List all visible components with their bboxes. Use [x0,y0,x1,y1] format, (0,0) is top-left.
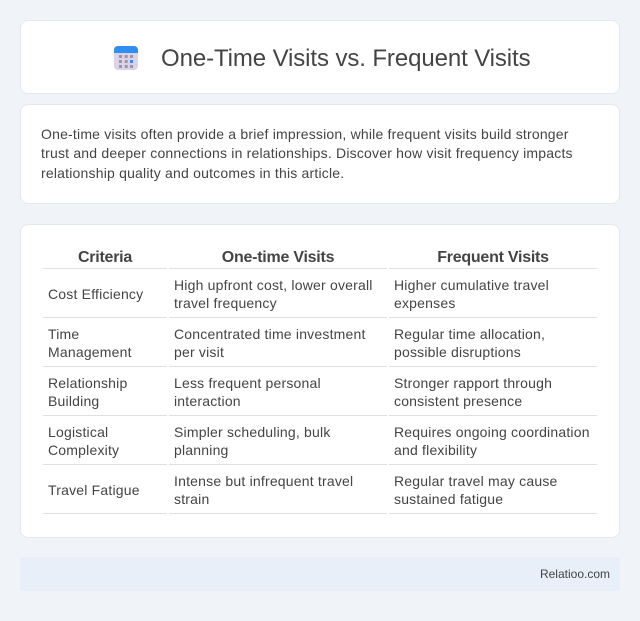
icon: calendar [114,46,138,70]
row: cost efficiency: Cost Efficiency [48,286,143,302]
row: travel fatigue [48,473,558,507]
row: logistical complexity: planning [174,442,229,458]
row: cost efficiency: travel frequency [174,295,277,311]
row: relationship building: Stronger rapport through [394,375,552,391]
row: relationship building: interaction [174,393,241,409]
row: travel fatigue: strain [174,491,209,507]
row: cost efficiency [48,277,549,311]
panel: comparison table [20,224,620,538]
header: frequent visits: Frequent Visits [437,249,549,266]
header: criteria: Criteria [78,249,132,266]
intro line 2: trust and deeper connections in relationships. Discover how visit frequency impacts [41,145,573,161]
row: relationship building: consistent presence [394,393,522,409]
row: logistical complexity: Logistical [48,424,108,440]
row: relationship building: Building [48,393,99,409]
row: travel fatigue: sustained fatigue [394,491,503,507]
row: time management: Concentrated time investment [174,326,366,342]
row: logistical complexity: and flexibility [394,442,477,458]
intro line 1: One-time visits often provide a brief impression, while frequent visits build stronger [41,126,569,142]
row: cost efficiency: expenses [394,295,456,311]
intro line 3: relationship quality and outcomes in this article. [41,165,344,181]
row: logistical complexity: Requires ongoing coordination [394,424,590,440]
row: logistical complexity [48,424,590,458]
row: logistical complexity: Simpler scheduling, bulk [174,424,331,440]
footer bar [20,557,620,591]
title: One-Time Visits vs. Frequent Visits [161,45,531,72]
panel: title card [20,20,620,94]
row: time management: per visit [174,344,224,360]
row: travel fatigue: Regular travel may cause [394,473,558,489]
panel: intro text [20,104,620,204]
row: cost efficiency: High upfront cost, lower overall [174,277,373,293]
row: relationship building: Less frequent personal [174,375,321,391]
row: relationship building [48,375,552,409]
row: time management: possible disruptions [394,344,521,360]
row: time management [48,326,545,360]
footer brand: Relatioo.com [540,567,610,581]
row: logistical complexity: Complexity [48,442,119,458]
row: time management: Management [48,344,132,360]
row: travel fatigue: Travel Fatigue [48,482,140,498]
row: relationship building: Relationship [48,375,127,391]
row: travel fatigue: Intense but infrequent travel [174,473,353,489]
row: cost efficiency: Higher cumulative travel [394,277,549,293]
row: time management: Time [48,326,79,342]
header: one-time visits: One-time Visits [222,249,334,266]
row: time management: Regular time allocation, [394,326,545,342]
